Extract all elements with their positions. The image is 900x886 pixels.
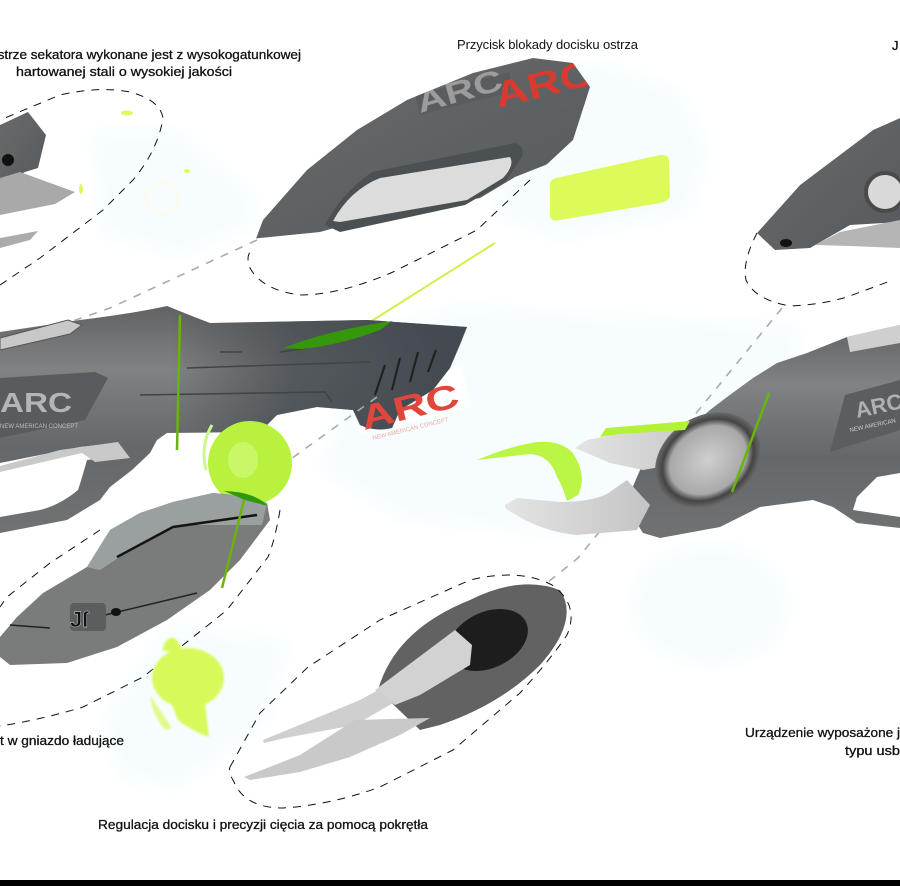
green leader line left [177, 315, 180, 450]
heading: usb port [745, 725, 900, 758]
white handle opening [0, 443, 125, 517]
right logo plate [830, 380, 900, 452]
dark groove [117, 515, 257, 557]
heading: lock button: Przycisk blokady docisku ostrza [457, 37, 639, 52]
white handle opening right [853, 473, 900, 517]
logo subtitle: NEW AMERICAN CONCEPT [0, 424, 78, 430]
trigger trim left [0, 320, 82, 350]
bottom black bar [0, 880, 900, 886]
logo text left: ARC [0, 387, 72, 418]
green accent on body [283, 321, 392, 349]
trigger button right [847, 325, 900, 352]
dashed leader: red logo to callout 4 [245, 397, 377, 492]
callout 5: adjustment dial detail [230, 575, 571, 808]
vent slots [375, 350, 436, 395]
callout 2: lock button detail: ARC [490, 52, 597, 116]
heading: blade steel [0, 47, 301, 79]
lime accent on upper blade [600, 421, 690, 437]
socket dot [111, 608, 121, 616]
heading: charging socket: t w gniazdo ładujące [0, 733, 124, 748]
nose section shading [170, 308, 467, 433]
callout 2: lock button detail [240, 50, 600, 295]
upper blade [575, 413, 713, 470]
leader line: lock button [370, 243, 495, 322]
heading: pressure adjustment: Regulacja docisku i precyzji cięcia za pomocą pokrętła [98, 817, 429, 832]
lower blade [505, 480, 650, 535]
faint yellow ring [146, 182, 178, 214]
pale background glow shapes [90, 60, 800, 790]
light upper band [87, 493, 267, 570]
right logo subtitle: NEW AMERICAN [849, 418, 896, 434]
dashed leader: callout 3 to callout 5 [548, 308, 782, 582]
main pruner: right half [505, 325, 900, 538]
lime hook blade [477, 442, 582, 501]
callout 3: top right detail [745, 118, 900, 306]
red logo: ARC [357, 377, 463, 438]
lime adjustment knob [150, 638, 224, 737]
callout 4: usb socket detail [0, 491, 280, 726]
seam lines [140, 348, 370, 402]
lime dial ball [204, 421, 292, 505]
callout 2: lock button detail: ARC [413, 64, 507, 120]
usb port [70, 603, 106, 631]
heading: usb port: typu usb [845, 743, 900, 758]
logo plate left [0, 372, 108, 438]
red logo [357, 377, 463, 442]
lime mark: callout 1 [79, 110, 190, 194]
red logo: NEW AMERICAN CONCEPT [372, 417, 449, 442]
handle trim [0, 442, 130, 472]
dashed outline [0, 510, 280, 726]
usb symbol: Jſ [70, 607, 89, 632]
dashed leader: callout 1 to body [70, 240, 257, 322]
lime overlap on top [224, 491, 268, 506]
green leader line callout 4 [222, 500, 244, 588]
blade pivot disc [637, 393, 779, 527]
heading: cut-off right: J [892, 38, 898, 53]
lime lock button [550, 155, 670, 220]
callout 1: blade detail [0, 90, 163, 285]
heading: usb port: Urządzenie wyposażone j [745, 725, 900, 740]
main pruner: left half [0, 306, 467, 533]
red logo backing [352, 366, 471, 434]
green leader line right [732, 393, 769, 492]
heading: blade steel: hartowanej stali o wysokiej jakości [16, 64, 232, 79]
dark seam [10, 593, 197, 628]
